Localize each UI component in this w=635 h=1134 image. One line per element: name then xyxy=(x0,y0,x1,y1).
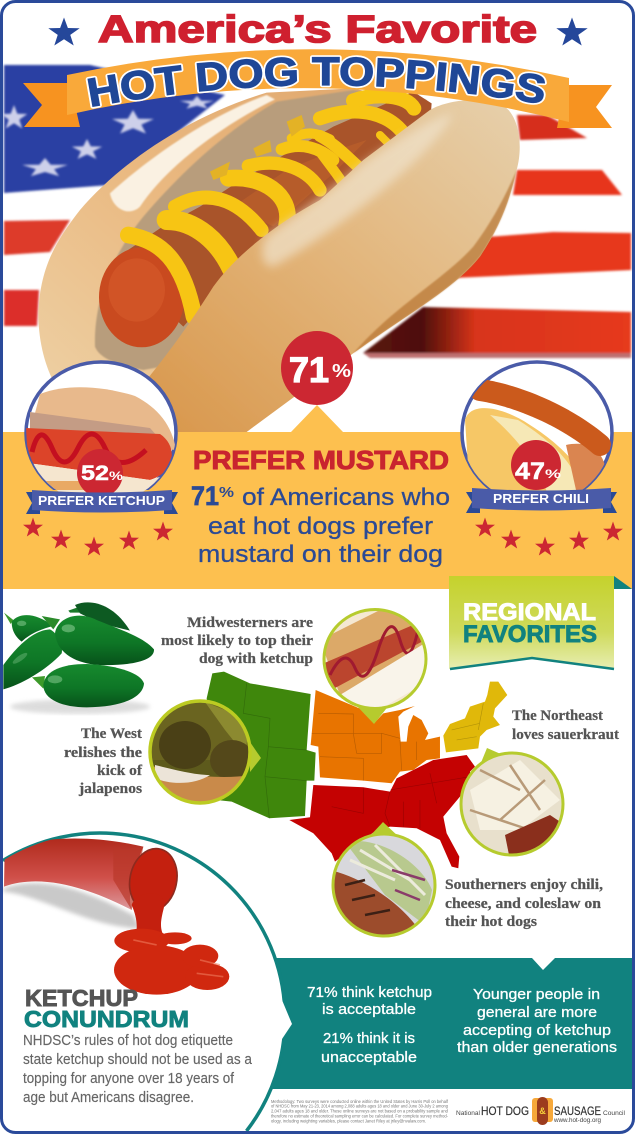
stars: right red row xyxy=(475,518,623,555)
heading: ketchup conundrum: CONUNDRUM xyxy=(24,1006,189,1032)
text: Southerners xyxy=(445,877,603,930)
badge: 71 percent: 71 xyxy=(289,351,329,390)
text: acceptance statistics: 71% think ketchup xyxy=(307,984,432,1001)
icon: left blue star xyxy=(48,18,80,46)
text: younger people: accepting of ketchup xyxy=(463,1022,611,1039)
logo: National Hot Dog and Sausage Council: www.hot-dog.org xyxy=(553,1117,601,1124)
panel: teal ketchup stats xyxy=(240,958,632,1089)
photo: jalapeno peppers xyxy=(3,602,154,714)
map region: Midwest xyxy=(311,690,440,783)
text: methodology: Methodology: Two surveys were conducted online within the United States by Harris Poll on behalf xyxy=(271,1099,449,1104)
text: younger people: Younger people in xyxy=(473,986,600,1003)
flag: regional favorites: FAVORITES xyxy=(463,621,597,648)
banner: hot dog toppings: HOT DOG TOPPINGS xyxy=(86,55,547,109)
circle: prefer chili xyxy=(462,362,612,504)
badge: 71 percent: % xyxy=(332,361,351,381)
ribbon: prefer ketchup xyxy=(26,490,178,514)
text: the West: The West xyxy=(81,726,142,742)
circle: prefer chili: 47 xyxy=(515,458,545,485)
logo: National Hot Dog and Sausage Council: SAUSAGE xyxy=(554,1104,601,1118)
logo: National Hot Dog and Sausage Council xyxy=(456,1097,626,1125)
text: ketchup etiquette xyxy=(23,1033,253,1106)
logo: National Hot Dog and Sausage Council: National xyxy=(456,1110,481,1117)
photo circle: sauerkraut xyxy=(460,748,565,860)
heading: ketchup conundrum xyxy=(24,985,189,1032)
banner: hot dog toppings xyxy=(23,49,612,128)
text: methodology xyxy=(271,1099,449,1124)
logo: National Hot Dog and Sausage Council: Council xyxy=(603,1110,626,1117)
icon: right blue star xyxy=(556,18,588,46)
text: the Northeast: loves sauerkraut xyxy=(512,727,619,743)
text: younger people xyxy=(457,986,617,1056)
banner: hot dog toppings: HOT DOG TOPPINGS xyxy=(88,56,545,107)
text: mustard statistic: mustard on their dog xyxy=(198,541,443,568)
map region: West xyxy=(207,672,316,818)
map: United States regions xyxy=(207,672,507,868)
photo: spilled ketchup bottle xyxy=(3,838,229,995)
text: methodology: 2,047 adults ages 18 and older. These online surveys are not based on a probability sample and xyxy=(271,1108,449,1114)
text: acceptance statistics: 21% think it is xyxy=(323,1030,415,1047)
text: mustard statistic: 71 xyxy=(191,481,219,511)
circle: prefer chili: % xyxy=(545,467,561,481)
text: mustard statistic xyxy=(191,481,450,568)
circle: prefer ketchup xyxy=(26,362,176,504)
text: Midwesterners: most likely to top their xyxy=(161,633,313,649)
photo circle: ketchup hot dog xyxy=(322,608,428,724)
stars: left red row xyxy=(23,518,173,555)
photo circle: coleslaw xyxy=(330,822,436,940)
text: acceptance statistics: is acceptable xyxy=(322,1001,416,1018)
map region: South xyxy=(289,755,475,868)
text: younger people: than older generations xyxy=(457,1039,617,1056)
panel: ketchup conundrum circle xyxy=(3,833,632,1131)
heading: prefer mustard: PREFER MUSTARD xyxy=(193,445,449,475)
logo: National Hot Dog and Sausage Council: HOT DOG xyxy=(481,1104,529,1118)
text: mustard statistic: % xyxy=(219,484,234,501)
text: the West: jalapenos xyxy=(78,781,142,797)
text: the Northeast: The Northeast xyxy=(512,708,603,724)
text: Southerners: cheese, and coleslaw on xyxy=(445,896,602,912)
text: Southerners: their hot dogs xyxy=(445,914,537,930)
photo circle: jalapenos xyxy=(149,700,261,810)
text: ketchup etiquette: age but Americans disagree. xyxy=(23,1090,194,1106)
ribbon: prefer chili: PREFER CHILI xyxy=(493,492,589,506)
text: acceptance statistics: unacceptable xyxy=(321,1049,417,1066)
text: ketchup etiquette: state ketchup should not be used as a xyxy=(23,1052,253,1068)
title: America's Favorite: America’s Favorite xyxy=(98,9,537,51)
text: Midwesterners: dog with ketchup xyxy=(199,651,313,667)
text: the West xyxy=(64,726,143,797)
text: the West: relishes the xyxy=(64,745,142,761)
circle: prefer ketchup: 52 xyxy=(81,462,109,485)
map state lines xyxy=(243,683,483,828)
text: methodology: of NHDSC from May 21-23, 2014 among 2,088 adults ages 18 and older and June 30-July 2 among xyxy=(271,1104,449,1108)
ribbon: prefer ketchup: PREFER KETCHUP xyxy=(38,493,165,508)
text: acceptance statistics xyxy=(307,984,432,1066)
text: methodology: ology, including weighting variables, please contact Janet Riley at jriley@nvalaw.com. xyxy=(271,1118,426,1124)
logo: National Hot Dog and Sausage Council: & xyxy=(539,1106,546,1116)
text: mustard statistic: eat hot dogs prefer xyxy=(208,513,433,540)
text: Midwesterners: Midwesterners are xyxy=(187,615,313,631)
map region: Northeast xyxy=(443,682,507,752)
text: mustard statistic: of Americans who xyxy=(242,484,450,511)
photo: hot dog with mustard xyxy=(38,88,520,432)
flag: regional favorites xyxy=(449,576,632,669)
text: ketchup etiquette: topping for anyone over 18 years of xyxy=(23,1071,235,1087)
badge: 71 percent xyxy=(281,331,353,405)
ribbon: prefer chili xyxy=(466,488,617,513)
flag: regional favorites: REGIONAL xyxy=(463,599,596,626)
text: Midwesterners xyxy=(161,615,313,667)
text: younger people: general are more xyxy=(477,1004,597,1021)
text: Southerners: Southerners enjoy chili, xyxy=(445,877,603,893)
text: ketchup etiquette: NHDSC’s rules of hot dog etiquette xyxy=(23,1033,233,1049)
text: the West: kick of xyxy=(97,763,143,779)
heading: ketchup conundrum: KETCHUP xyxy=(25,985,138,1011)
text: methodology: therefore no estimate of theoretical sampling error can be calculated. For complete survey method- xyxy=(271,1114,449,1118)
yellow panel: prefer mustard xyxy=(3,405,632,589)
circle: prefer ketchup: % xyxy=(109,469,123,483)
text: the Northeast xyxy=(512,708,619,743)
photo: American flag background xyxy=(1,65,631,358)
